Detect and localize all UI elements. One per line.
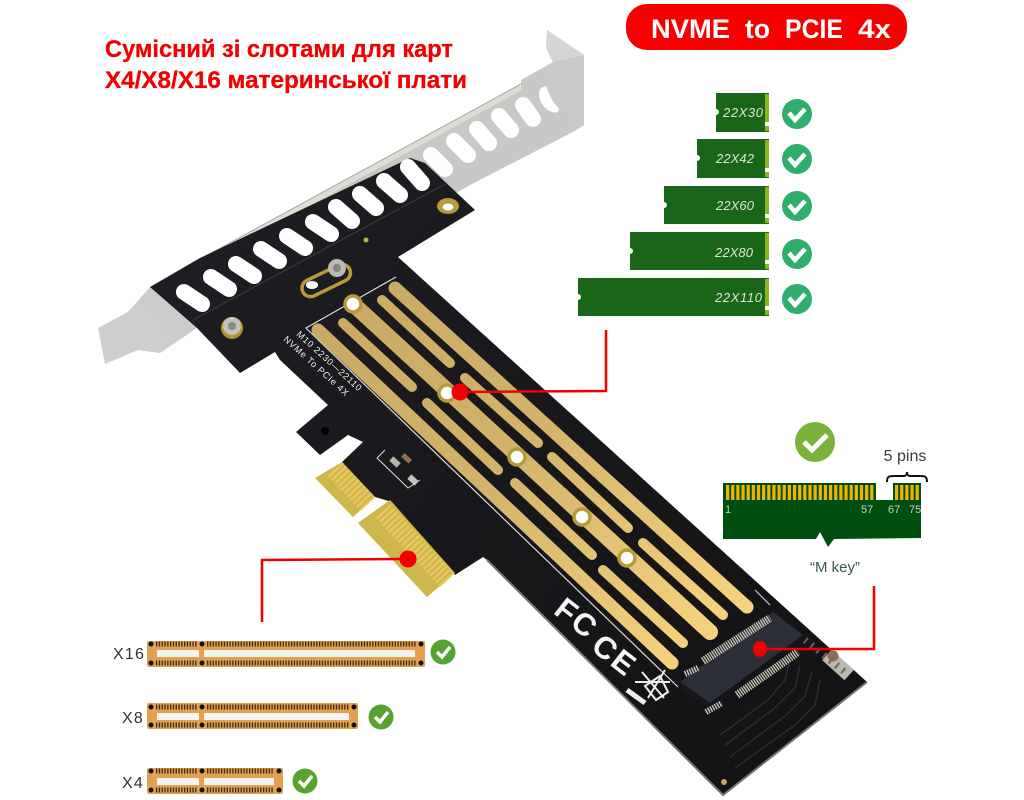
brace [887, 472, 927, 482]
card 22X30: 22X30 [722, 105, 764, 120]
board text: M10 2230—22110 [295, 329, 364, 393]
recycling bin mark [635, 670, 670, 700]
PCIe slot X8 [122, 703, 394, 730]
M.2 connector [680, 612, 803, 712]
slot at bracket end [539, 86, 559, 113]
card 22X60: 22X60 [715, 198, 755, 213]
small components [377, 450, 854, 680]
card 22X80 [627, 232, 769, 270]
callout: PCIe slots [262, 550, 416, 622]
PCIe slot X16 [113, 640, 456, 667]
pin numbers [725, 504, 921, 516]
title: compatibility note: Сумісний зі слотами для карт [105, 36, 453, 63]
PCIe slot X4 [122, 768, 318, 794]
adapter card photo [98, 30, 867, 795]
icon: M key check [795, 422, 835, 462]
CE mark: CE [585, 627, 644, 684]
badge: NVME to PCIE 4x: PCIE [785, 14, 843, 44]
card 22X80: 22X80 [714, 245, 754, 260]
M.2 size cards [575, 93, 769, 316]
PCIe gold fingers [315, 462, 455, 597]
board fold line [193, 183, 447, 320]
silkscreen outline [306, 277, 678, 687]
mounting screws and holes [221, 198, 727, 785]
M key label: “M key” [810, 559, 860, 576]
pin numbers: 57 [861, 504, 873, 516]
PCIe slot X16: X16 [113, 646, 145, 663]
M key diagram [723, 422, 927, 576]
metal bracket [98, 30, 584, 364]
pin numbers: 75 [909, 504, 921, 516]
pin numbers: 67 [888, 504, 900, 516]
badge: NVME to PCIE 4x: to [745, 14, 770, 44]
card 22X110 [575, 278, 769, 316]
pad holes [345, 296, 635, 566]
PCIe slot X8: X8 [122, 710, 144, 727]
pin numbers: 1 [725, 504, 731, 516]
5 pins label: 5 pins [884, 448, 926, 465]
PCIe slot X4: X4 [122, 775, 144, 792]
bar mark [627, 690, 645, 703]
callout: M key [753, 586, 874, 657]
title: compatibility note: X4/X8/X16 материнської плати [105, 67, 467, 94]
bracket slots [184, 105, 533, 304]
board traces [720, 660, 820, 768]
card 22X42: 22X42 [715, 151, 755, 166]
contact pins [726, 485, 920, 500]
callout: M.2 sizes [452, 330, 606, 400]
badge: NVME to PCIE 4x: 4x [858, 14, 891, 44]
gold pads [318, 288, 747, 663]
size check icons [782, 99, 812, 314]
board edge highlight [487, 560, 867, 795]
card 22X60 [661, 186, 769, 224]
board text: NVMe To PCIe 4X [282, 334, 351, 398]
M key card [723, 483, 921, 547]
badge: NVME to PCIE 4x: NVME [651, 14, 730, 44]
badge: NVME to PCIE 4x [626, 4, 907, 50]
circuit board [150, 158, 867, 795]
callout lines [262, 330, 874, 657]
FC mark: FC [548, 591, 605, 646]
card 22X42 [694, 139, 769, 178]
card 22X110: 22X110 [714, 290, 763, 305]
card 22X30 [713, 93, 769, 132]
title: compatibility note [105, 36, 467, 94]
